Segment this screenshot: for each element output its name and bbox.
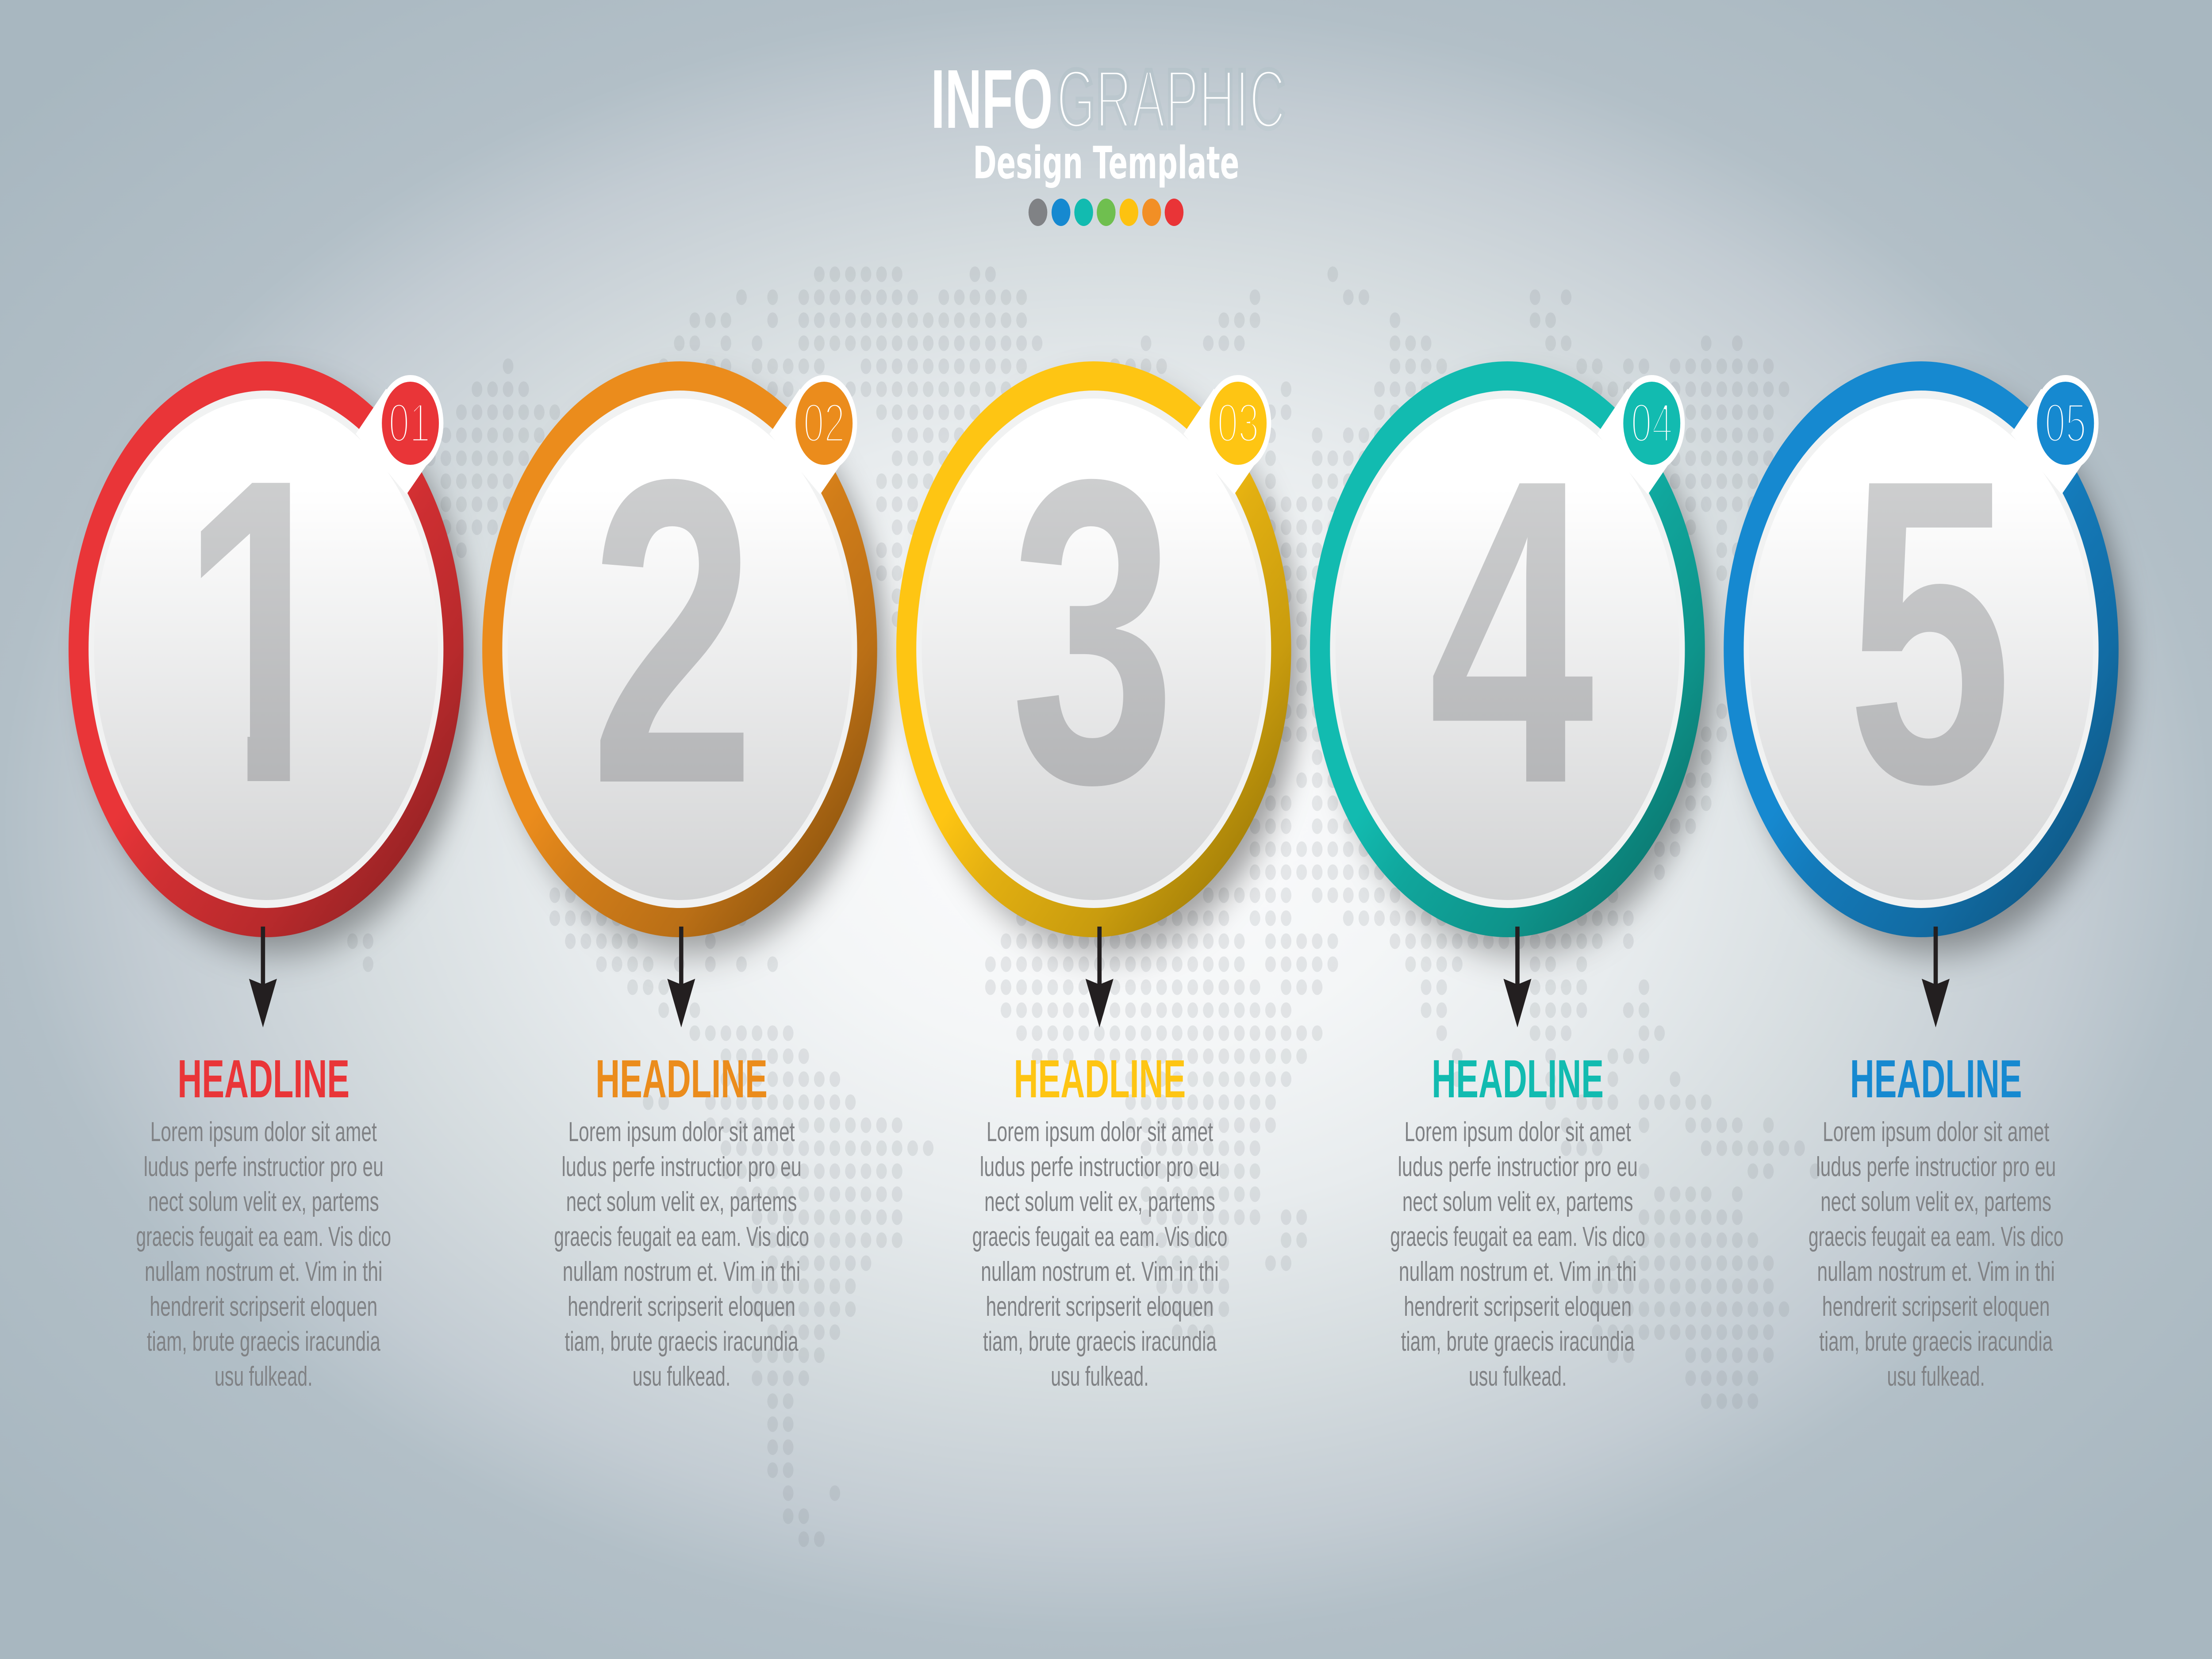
badge [2032,375,2099,471]
arrow 1 [249,927,277,1027]
body text 1: nullam nostrum et. Vim in thi [145,1257,383,1287]
badge number: 02 [803,392,845,454]
body text 4: Lorem ipsum dolor sit amet [1405,1117,1631,1147]
title: GRAPHIC: GRAPHIC [1056,53,1286,146]
badge connector [356,389,436,494]
body text 5: hendrerit scripserit eloquen [1822,1291,2050,1322]
body text 4: usu fulkead. [1469,1361,1567,1392]
body text 1: tiam, brute graecis iracundia [147,1326,380,1357]
body text 1: Lorem ipsum dolor sit amet [150,1117,377,1147]
headline 1: HEADLINE [177,1049,349,1109]
big numeral 4: 4 [1429,390,1596,874]
coloured ring [896,361,1291,937]
coloured ring [1724,361,2119,937]
body text 5: graecis feugait ea eam. Vis dico [1809,1222,2063,1252]
body text 3: tiam, brute graecis iracundia [983,1326,1217,1357]
body text 2: Lorem ipsum dolor sit amet [568,1117,795,1147]
colour dots [1029,199,1183,226]
step 5 circle [1724,361,2129,952]
badge connector [769,389,849,494]
shadow [913,386,1302,952]
body text 4: tiam, brute graecis iracundia [1401,1326,1635,1357]
body text 5 [1809,1117,2063,1392]
inner disc [94,398,438,900]
body text 2: tiam, brute graecis iracundia [565,1326,799,1357]
body text 2: hendrerit scripserit eloquen [568,1291,795,1322]
big numeral 1: 1 [180,389,346,874]
body text 5: ludus perfe instructior pro eu [1816,1152,2056,1182]
light inner rim [88,391,443,908]
body text 4: nullam nostrum et. Vim in thi [1399,1257,1636,1287]
big numeral 3: 3 [1010,390,1176,874]
body text 2 [554,1117,809,1392]
arrow 3 [1086,927,1114,1027]
badge number: 05 [2045,392,2086,454]
body text 1: usu fulkead. [215,1361,312,1392]
shadow [85,386,474,952]
body text 5: Lorem ipsum dolor sit amet [1823,1117,2049,1147]
body text 2: nect solum velit ex, partems [566,1187,797,1217]
text block 4 [1390,1049,1645,1392]
body text 1 [136,1117,391,1392]
text block 2 [554,1049,809,1392]
body text 2: nullam nostrum et. Vim in thi [563,1257,800,1287]
light inner rim [502,391,857,908]
body text 4: nect solum velit ex, partems [1402,1187,1633,1217]
title: INFO: INFO [931,53,1053,146]
body text 3: ludus perfe instructior pro eu [980,1152,1220,1182]
step 3 circle [896,361,1302,952]
body text 4: hendrerit scripserit eloquen [1404,1291,1632,1322]
inner disc [508,398,852,900]
step 4 circle [1310,361,1715,952]
body text 3: nullam nostrum et. Vim in thi [981,1257,1219,1287]
subtitle: Design Template [973,138,1239,189]
badge [1619,375,1685,471]
body text 1: hendrerit scripserit eloquen [150,1291,377,1322]
badge number: 01 [388,392,430,454]
step 2 circle [482,361,887,952]
light inner rim [1330,391,1685,908]
big numeral 5: 5 [1847,390,2012,874]
badge [377,375,443,471]
body text 4 [1390,1117,1645,1392]
body text 1: nect solum velit ex, partems [148,1187,379,1217]
body text 3 [972,1117,1227,1392]
body text 3: nect solum velit ex, partems [984,1187,1215,1217]
headline 3: HEADLINE [1014,1049,1186,1109]
text block 5 [1809,1049,2063,1392]
body text 3: Lorem ipsum dolor sit amet [987,1117,1213,1147]
body text 3: graecis feugait ea eam. Vis dico [972,1222,1227,1252]
badge [791,375,857,471]
shadow [1741,386,2129,952]
shadow [499,386,887,952]
body text 3: usu fulkead. [1051,1361,1149,1392]
badge connector [2011,389,2091,494]
inner disc [922,398,1266,900]
body text 5: nect solum velit ex, partems [1820,1187,2051,1217]
body text 5: tiam, brute graecis iracundia [1819,1326,2053,1357]
dotted world map [353,274,1815,1539]
body text 1: ludus perfe instructior pro eu [144,1152,384,1182]
arrow 5 [1922,927,1950,1027]
coloured ring [482,361,877,937]
inner disc [1749,398,2093,900]
shadow [1327,386,1715,952]
coloured ring [1310,361,1705,937]
body text 2: ludus perfe instructior pro eu [561,1152,802,1182]
badge number: 03 [1217,392,1259,454]
body text 1: graecis feugait ea eam. Vis dico [136,1222,391,1252]
light inner rim [916,391,1271,908]
text block 3 [972,1049,1227,1392]
coloured ring [69,361,464,937]
title block [931,53,1286,226]
big numeral 2: 2 [590,390,755,874]
body text 2: graecis feugait ea eam. Vis dico [554,1222,809,1252]
step 1 circle [69,361,474,952]
body text 2: usu fulkead. [633,1361,730,1392]
badge [1205,375,1271,471]
badge connector [1183,389,1263,494]
light inner rim [1743,391,2099,908]
headline 4: HEADLINE [1432,1049,1604,1109]
headline 2: HEADLINE [595,1049,768,1109]
arrow 4 [1503,927,1532,1027]
body text 5: nullam nostrum et. Vim in thi [1817,1257,2055,1287]
headline 5: HEADLINE [1850,1049,2022,1109]
badge number: 04 [1631,392,1673,454]
body text 3: hendrerit scripserit eloquen [986,1291,1214,1322]
body text 4: ludus perfe instructior pro eu [1398,1152,1638,1182]
body text 4: graecis feugait ea eam. Vis dico [1390,1222,1645,1252]
badge connector [1597,389,1677,494]
arrow 2 [667,927,695,1027]
inner disc [1336,398,1679,900]
body text 5: usu fulkead. [1887,1361,1985,1392]
text block 1 [136,1049,391,1392]
